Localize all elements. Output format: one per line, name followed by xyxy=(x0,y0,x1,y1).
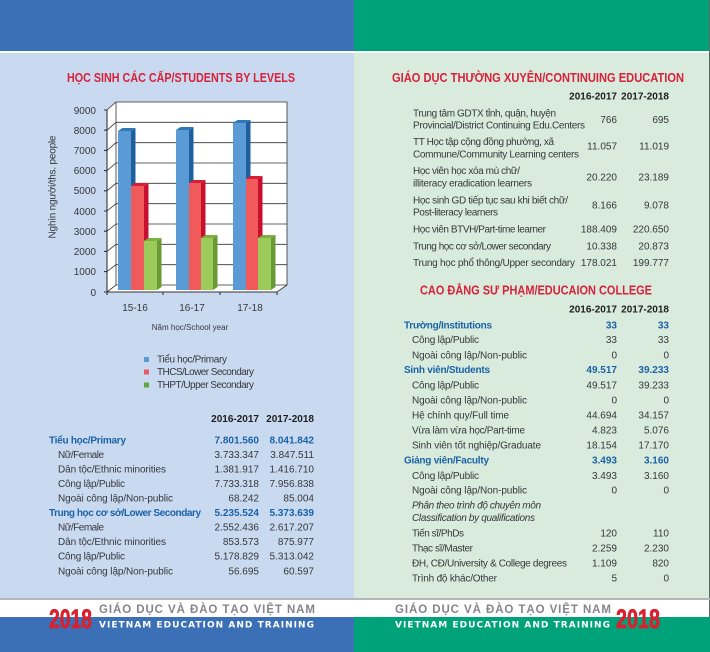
table: students by levels: 3.847.511 xyxy=(270,450,314,461)
table: education college: 3.493 xyxy=(592,456,617,466)
table: education college: Ngoài công lập/Non-public xyxy=(412,486,527,496)
table: students by levels: 1.381.917 xyxy=(214,464,259,476)
table: education college: 820 xyxy=(652,558,669,570)
table: education college: 39.233 xyxy=(638,365,669,376)
table: education college: 2.259 xyxy=(592,544,617,554)
table: continuing education: 766 xyxy=(600,115,617,126)
table: education college: 39.233 xyxy=(638,380,669,392)
table: continuing education: 9.078 xyxy=(644,200,669,212)
table: education college: 33 xyxy=(606,320,617,332)
y axis values: 1000 xyxy=(74,267,96,278)
table: education college: 0 xyxy=(663,574,669,584)
table: education college: Ngoài công lập/Non-public xyxy=(412,396,527,406)
panel: continuing education and college xyxy=(354,53,709,598)
table: education college: ĐH, CĐ/University & College degrees xyxy=(412,558,567,570)
table: education college: Trình độ khác/Other xyxy=(412,574,498,584)
table: continuing education: 11.057 xyxy=(587,142,617,152)
table: continuing education: Commune/Community Learning centers xyxy=(413,150,579,160)
x axis title: Năm học/School year xyxy=(152,323,229,332)
table: students by levels: 68.242 xyxy=(228,494,259,504)
table: continuing education: 695 xyxy=(652,115,669,126)
table: students by levels: 2.617.207 xyxy=(270,522,314,534)
top band: blue xyxy=(0,0,354,51)
table: education college: Tiến sĩ/PhDs xyxy=(412,528,464,540)
table: education college: Công lập/Public xyxy=(412,471,479,482)
table: continuing education: 10.338 xyxy=(586,242,617,252)
footer: left xyxy=(0,603,354,652)
table: students by levels: 85.004 xyxy=(283,494,314,504)
top band: green xyxy=(354,0,710,51)
table: students by levels: Ngoài công lập/Non-public xyxy=(58,566,173,578)
table: education college: 5.076 xyxy=(644,426,669,436)
table: education college: 49.517 xyxy=(586,365,617,376)
table: education college: 1.109 xyxy=(592,558,617,570)
table: students by levels: 1.416.710 xyxy=(270,464,314,476)
table: students by levels: 2.552.436 xyxy=(214,522,259,534)
y axis values: 3000 xyxy=(74,227,96,238)
heading: students by levels: HỌC SINH CÁC CẤP/STUDENTS BY LEVELS xyxy=(67,70,295,85)
table: continuing education: 11.019 xyxy=(639,142,669,152)
table: education college: 2.230 xyxy=(644,544,669,554)
table: students by levels: 60.597 xyxy=(283,566,314,578)
table: continuing education: illiteracy eradication learners xyxy=(413,178,532,190)
table: students by levels xyxy=(49,414,314,578)
table: students by levels: 2016-2017 xyxy=(211,414,259,425)
chart legend: THCS/Lower Secondary xyxy=(157,367,254,378)
table: education college: Công lập/Public xyxy=(412,380,479,392)
table: education college: 2016-2017 xyxy=(569,304,617,316)
table: students by levels: 3.733.347 xyxy=(214,450,259,461)
table: continuing education: 23.189 xyxy=(638,172,669,184)
table: education college: Vừa làm vừa học/Part-time xyxy=(412,426,525,436)
table: continuing education: Học viên học xóa mù chữ/ xyxy=(413,166,520,177)
table: education college: 3.160 xyxy=(644,456,669,466)
y axis values: 7000 xyxy=(74,146,96,157)
table: education college: 4.823 xyxy=(592,426,617,436)
y axis values: 6000 xyxy=(74,166,96,177)
heading: education college: CAO ĐẲNG SƯ PHẠM/EDUCAION COLLEGE xyxy=(420,282,652,298)
table: education college: 33 xyxy=(606,335,617,346)
y axis values: 2000 xyxy=(74,247,96,258)
footer title: Vietnamese: GIÁO DỤC VÀ ĐÀO TẠO VIỆT NAM xyxy=(395,603,611,616)
y axis values: 8000 xyxy=(74,126,96,137)
table: continuing education: 20.873 xyxy=(638,242,669,252)
panel: students by levels xyxy=(0,53,354,598)
table: students by levels: 7.956.838 xyxy=(270,479,314,490)
chart legend xyxy=(144,354,254,391)
table: students by levels: 5.235.524 xyxy=(214,508,259,519)
table: students by levels: 875.977 xyxy=(278,537,314,548)
table: students by levels: Trung học cơ sở/Lower Secondary xyxy=(49,508,201,519)
year 2018: 2018 xyxy=(616,604,660,634)
table: students by levels: Ngoài công lập/Non-public xyxy=(58,494,173,504)
table: education college: Sinh viên/Students xyxy=(404,365,490,376)
table: education college: 17.170 xyxy=(638,440,669,452)
table: education college: Ngoài công lập/Non-public xyxy=(412,350,527,362)
table: continuing education xyxy=(413,92,669,269)
table: education college: Sinh viên tốt nghiệp/Graduate xyxy=(412,440,541,452)
y axis values: 0 xyxy=(90,288,96,299)
table: education college: Classification by qualifications xyxy=(412,513,535,524)
table: continuing education: Học sinh GD tiếp tục sau khi biết chữ/ xyxy=(413,194,568,206)
bar chart: students by level xyxy=(48,102,287,332)
table: education college: 34.157 xyxy=(638,410,669,422)
bars: 17-18 xyxy=(233,120,276,290)
table: education college: 49.517 xyxy=(586,380,617,392)
table: students by levels: 5.313.042 xyxy=(270,552,314,562)
table: education college xyxy=(404,304,669,584)
x axis categories: 17-18 xyxy=(237,303,263,314)
table: students by levels: 8.041.842 xyxy=(270,436,314,446)
table: education college: Thạc sĩ/Master xyxy=(412,544,474,554)
table: education college: 33 xyxy=(658,335,669,346)
bars: 16-17 xyxy=(176,127,218,290)
table: students by levels: Nữ/Female xyxy=(58,522,104,534)
table: continuing education: TT Học tập cộng đồng phường, xã xyxy=(413,136,554,148)
footer title: Vietnamese: GIÁO DỤC VÀ ĐÀO TẠO VIỆT NAM xyxy=(99,603,315,616)
table: education college: Hệ chính quy/Full time xyxy=(412,410,509,422)
table: education college: 0 xyxy=(663,350,669,362)
table: students by levels: Dân tộc/Ethnic minorities xyxy=(58,464,166,476)
table: education college: 0 xyxy=(663,486,669,496)
table: education college: 33 xyxy=(658,320,669,332)
y axis values: 9000 xyxy=(74,106,96,117)
y axis title: Nghìn người/ths. people xyxy=(48,135,58,238)
table: students by levels: 5.178.829 xyxy=(214,552,259,562)
table: continuing education: Post-literacy learners xyxy=(413,208,498,218)
table: students by levels: 7.733.318 xyxy=(214,479,259,490)
table: education college: 110 xyxy=(653,528,669,540)
table: education college: 3.160 xyxy=(644,471,669,482)
table: education college: 2017-2018 xyxy=(621,304,669,316)
table: students by levels: Dân tộc/Ethnic minorities xyxy=(58,537,166,548)
x axis categories: 15-16 xyxy=(122,303,148,314)
table: education college: 120 xyxy=(600,528,617,540)
x axis categories: 16-17 xyxy=(179,303,205,314)
bars: 15-16 xyxy=(118,128,162,290)
table: continuing education: Trung học cơ sở/Lower secondary xyxy=(413,240,551,252)
table: students by levels: Tiểu học/Primary xyxy=(49,434,126,446)
table: continuing education: Trung học phổ thông/Upper secondary xyxy=(413,257,575,269)
table: education college: 0 xyxy=(611,486,617,496)
table: continuing education: 188.409 xyxy=(581,224,617,236)
table: continuing education: Provincial/District Continuing Edu.Centers xyxy=(413,120,585,132)
table: education college: Công lập/Public xyxy=(412,335,479,346)
table: students by levels: Nữ/Female xyxy=(58,450,104,461)
table: continuing education: Trung tâm GDTX tỉnh, quận, huyện xyxy=(413,108,556,120)
y axis values: 4000 xyxy=(74,207,96,218)
table: education college: 0 xyxy=(611,350,617,362)
table: students by levels: 56.695 xyxy=(228,566,259,578)
table: education college: 18.154 xyxy=(586,440,617,452)
table: education college: Trường/Institutions xyxy=(404,320,492,332)
table: continuing education: Học viên BTVH/Part-time learner xyxy=(413,224,547,236)
chart legend: Tiểu học/Primary xyxy=(157,354,227,366)
footer: right xyxy=(354,603,710,652)
table: education college: 3.493 xyxy=(592,471,617,482)
footer title: English: VIETNAM EDUCATION AND TRAINING xyxy=(395,620,610,630)
table: students by levels: 2017-2018 xyxy=(266,414,314,425)
table: continuing education: 220.650 xyxy=(633,224,669,236)
y axis values xyxy=(74,106,96,299)
y axis values: 5000 xyxy=(74,186,96,197)
table: continuing education: 8.166 xyxy=(592,200,617,212)
table: education college: Phân theo trình độ chuyên môn xyxy=(412,500,541,512)
table: students by levels: 5.373.639 xyxy=(270,508,314,519)
table: students by levels: 853.573 xyxy=(223,537,259,548)
table: education college: 5 xyxy=(611,574,617,584)
table: continuing education: 2017-2018 xyxy=(621,92,669,102)
x axis categories xyxy=(122,303,263,314)
year 2018: 2018 xyxy=(49,604,92,634)
table: students by levels: Công lập/Public xyxy=(58,479,125,490)
table: education college: 44.694 xyxy=(586,410,617,422)
table: education college: 0 xyxy=(663,396,669,406)
table: students by levels: 7.801.560 xyxy=(214,436,259,446)
table: continuing education: 199.777 xyxy=(633,258,669,269)
table: education college: Giảng viên/Faculty xyxy=(404,456,489,466)
table: students by levels: Công lập/Public xyxy=(58,552,125,562)
table: continuing education: 20.220 xyxy=(586,172,617,184)
chart legend: THPT/Upper Secondary xyxy=(157,380,254,391)
footer title: English: VIETNAM EDUCATION AND TRAINING xyxy=(99,620,314,630)
table: education college: 0 xyxy=(611,396,617,406)
table: continuing education: 178.021 xyxy=(581,258,617,269)
table: continuing education: 2016-2017 xyxy=(569,92,617,102)
